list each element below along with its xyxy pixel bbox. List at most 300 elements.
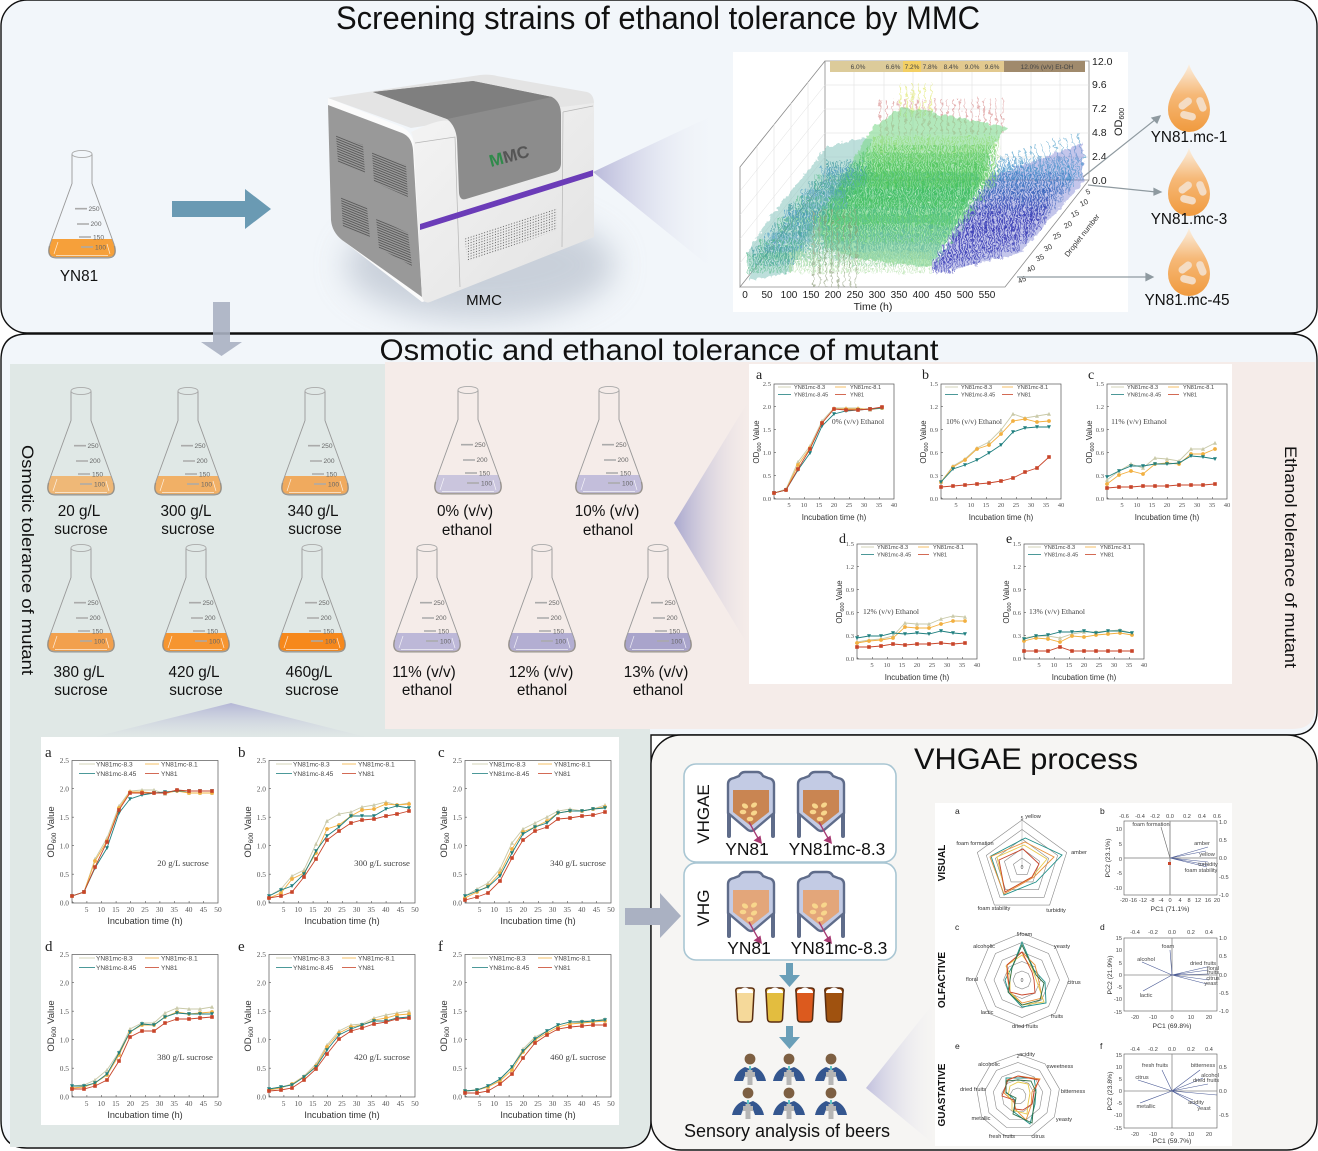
droplet axis ticks: 20 (1062, 219, 1074, 231)
flask: 380 g/L sucrose: 250 (88, 600, 99, 607)
PCA b (1100, 806, 1229, 913)
chart: sucrose a: a (45, 745, 52, 761)
flask: 20 g/L sucrose: 250 (88, 443, 99, 450)
PCA f: bitterness (1191, 1063, 1215, 1069)
chart: ethanol b: OD (919, 452, 928, 464)
flask: 13% ethanol: 200 (666, 615, 678, 622)
light cone: sensory to results (866, 1000, 936, 1146)
radar e: yeasty (1056, 1117, 1072, 1123)
chart: sucrose a: Incubation time (h) (107, 916, 183, 926)
flask: 300 g/L sucrose: 200 (196, 458, 208, 465)
flask: YN81 seed culture: YN81 (60, 268, 98, 285)
chart: sucrose c (438, 745, 615, 926)
PCA f: -15 (1114, 1126, 1122, 1132)
chart: sucrose d (45, 939, 222, 1120)
PCA f: 0.0 (1219, 1089, 1227, 1095)
chart: ethanol b: 10 (968, 502, 975, 509)
chart: ethanol e: e (1006, 532, 1012, 547)
droplet: YN81.mc-45 (1144, 228, 1230, 309)
droplet axis ticks (1016, 187, 1092, 286)
chart: sucrose b: Value (243, 806, 254, 833)
PCA f: -0.4 (1130, 1047, 1140, 1053)
chart: sucrose c: 600 (444, 832, 451, 843)
PCA d: 0.0 (1168, 930, 1176, 936)
flask: 460 g/L sucrose: 250 (318, 600, 330, 607)
chart: sucrose c: 1.5 (453, 813, 462, 822)
chart: sucrose d: 600 (51, 1026, 58, 1037)
chart: ethanol b: YN81 (1017, 392, 1031, 398)
chart: sucrose d: YN81 (161, 965, 178, 972)
ethanol concentration band: 6.6% (886, 64, 901, 71)
flask: 20 g/L sucrose: sucrose (54, 521, 108, 538)
chart: sucrose e: 420 g/L sucrose (354, 1052, 410, 1062)
PCA f: 0.0 (1168, 1047, 1176, 1053)
flask: 20 g/L sucrose: 150 (92, 472, 103, 478)
PCA b: b (1100, 806, 1105, 816)
chart: ethanol b (919, 368, 1065, 522)
flask: 0% ethanol: ethanol (442, 522, 492, 539)
chart: sucrose a: 25 (141, 905, 149, 914)
ethanol concentration band: 9.6% (985, 64, 1000, 71)
chart: ethanol a: 25 (846, 502, 853, 509)
MMC machine (328, 75, 615, 320)
radar e: citrus (1031, 1134, 1045, 1140)
chart: ethanol a: 600 (757, 442, 763, 452)
chart: ethanol d: 40 (974, 662, 981, 669)
time axis ticks: 300 (869, 290, 886, 301)
chart: ethanol c: Incubation time (h) (1135, 513, 1200, 522)
PCA b: 0.4 (1198, 814, 1206, 820)
chart: sucrose c: 45 (593, 905, 600, 914)
chart: ethanol e: 0.0 (1013, 656, 1022, 663)
droplet axis ticks: 35 (1034, 252, 1046, 264)
arrow: flask to MMC (172, 189, 271, 229)
chart: sucrose c: YN81 (554, 771, 571, 778)
ethanol concentration band (830, 61, 1085, 72)
chart: ethanol e: 15 (1066, 662, 1073, 669)
ethanol concentration band: 9.0% (965, 64, 980, 71)
chart: sucrose a: 20 g/L sucrose (157, 858, 209, 868)
PCA b: -10 (1114, 886, 1122, 892)
PCA b: foam stability (1185, 868, 1218, 874)
light cone: sucrose flasks to charts (90, 703, 370, 738)
time axis ticks: 450 (935, 290, 952, 301)
PCA b: 0.0 (1219, 856, 1227, 862)
chart: ethanol e: 0.3 (1013, 633, 1022, 640)
chart: ethanol a: 30 (861, 502, 868, 509)
chart: ethanol d: 5 (870, 662, 874, 669)
OD axis ticks: 12.0 (1092, 56, 1113, 68)
droplet: YN81.mc-1 (1151, 64, 1227, 146)
flask: 300 g/L sucrose: 100 (201, 482, 212, 488)
chart: ethanol e: 25 (1096, 662, 1103, 669)
chart: sucrose e: 25 (338, 1099, 346, 1108)
PCA b: foam formation (1132, 822, 1170, 828)
flask: 380 g/L sucrose (48, 544, 114, 699)
flask: 300 g/L sucrose (155, 387, 221, 538)
chart: ethanol c: YN81 (1183, 392, 1197, 398)
chart: ethanol d: 0.3 (846, 633, 855, 640)
chart: sucrose f: 10 (491, 1099, 498, 1108)
chart: sucrose b (238, 745, 419, 926)
chart: ethanol b: 0.0 (930, 496, 939, 503)
radar c: 0 (1021, 978, 1024, 984)
chart: sucrose d: YN81mc-8.45 (96, 965, 137, 972)
chart: ethanol a: 35 (876, 502, 883, 509)
chart: sucrose d: 1.5 (60, 1007, 69, 1016)
flask: 20 g/L sucrose (48, 387, 114, 538)
flask: 420 g/L sucrose (163, 544, 229, 699)
chart: ethanol e: 0.9 (1013, 587, 1022, 594)
chart: sucrose b: 1.0 (257, 842, 266, 850)
PCA f: -0.5 (1219, 1113, 1229, 1119)
flask: 420 g/L sucrose: 250 (202, 600, 214, 607)
chart: ethanol c: 11% (v/v) Ethanol (1111, 417, 1167, 426)
flask: YN81 seed culture (49, 150, 115, 285)
chart: sucrose d: d (45, 939, 53, 955)
card: VHG fermentation (684, 863, 896, 960)
chart: ethanol a: YN81mc-8.1 (850, 385, 881, 391)
PCA d: -0.4 (1130, 930, 1140, 936)
PCA b: 0 (1119, 857, 1122, 863)
icons: beers (736, 988, 843, 1022)
radar e: fresh fruits (989, 1134, 1015, 1140)
chart: sucrose f: 45 (593, 1099, 600, 1108)
chart: sucrose d: 20 (127, 1099, 134, 1108)
chart: sucrose f: 0.5 (453, 1064, 462, 1073)
flask: 13% ethanol: 150 (669, 628, 680, 636)
chart: sucrose a: 10 (98, 905, 105, 914)
PCA f: 5 (1119, 1077, 1122, 1083)
chart: ethanol b: YN81mc-8.45 (961, 392, 995, 398)
PCA f: 0 (1170, 1132, 1174, 1138)
flask: 10% ethanol (575, 386, 642, 539)
chart: ethanol e: 600 (1007, 602, 1013, 612)
chart: ethanol a: 5 (787, 502, 791, 509)
chart: sucrose c: 25 (534, 905, 542, 914)
chart: sucrose a: YN81mc-8.3 (96, 762, 133, 768)
chart: sucrose b: 600 (248, 832, 255, 843)
side title: osmotic: Osmotic tolerance of mutant (18, 445, 36, 675)
flask: 460 g/L sucrose (279, 544, 345, 699)
PCA b: -0.2 (1150, 814, 1160, 820)
chart: ethanol c: 1.5 (1096, 381, 1105, 388)
chart: sucrose a: 15 (112, 905, 120, 914)
flask: 0% ethanol (435, 386, 501, 539)
chart: sucrose c: YN81mc-8.1 (554, 762, 591, 768)
card: VHG fermentation: YN81mc-8.3 (791, 938, 887, 958)
chart: sucrose e: 1.5 (257, 1007, 266, 1016)
chart: ethanol d: 35 (959, 662, 966, 669)
chart: sucrose b: 50 (411, 905, 419, 914)
chart: sucrose c: 340 g/L sucrose (550, 858, 606, 868)
radar a: turbidity (1046, 908, 1066, 914)
chart: sucrose f: Incubation time (h) (500, 1110, 576, 1120)
chart: ethanol a: 1.5 (763, 427, 772, 434)
time axis ticks: 50 (761, 290, 773, 301)
PCA b: -8 (1150, 898, 1154, 904)
chart: ethanol e: Value (1002, 580, 1011, 602)
chart: ethanol a: 10 (801, 502, 808, 509)
chart: ethanol e: 1.5 (1013, 541, 1022, 548)
chart: ethanol b: 20 (998, 502, 1005, 509)
chart: sucrose d: YN81mc-8.1 (161, 956, 198, 962)
chart: sucrose d: 40 (185, 1099, 193, 1108)
OD axis ticks: 7.2 (1092, 103, 1107, 115)
flask: 13% ethanol: 100 (671, 638, 682, 646)
PCA b: -1.0 (1219, 893, 1229, 899)
chart: ethanol c: 0.0 (1096, 496, 1105, 503)
chart: ethanol d: 1.2 (846, 564, 854, 571)
flask: 10% ethanol: 10% (v/v) (575, 503, 639, 520)
chart: sucrose d: 15 (112, 1099, 120, 1108)
arrow: fermentation to beers (779, 963, 800, 987)
chart: sucrose e: e (238, 939, 245, 955)
ethanol concentration band: 12.0% (v/v) Et-OH (1021, 64, 1074, 71)
chart: sucrose e: 1.0 (257, 1036, 266, 1044)
chart: ethanol d: YN81 (933, 552, 947, 558)
chart: ethanol b: b (922, 368, 929, 383)
flask: 20 g/L sucrose: 200 (90, 458, 101, 465)
chart: ethanol a: 15 (816, 502, 823, 509)
chart: ethanol d: 30 (944, 662, 951, 669)
3D growth chart (733, 52, 1128, 313)
flask: 300 g/L sucrose: 150 (199, 472, 210, 478)
chart: sucrose b: OD (243, 843, 254, 858)
chart: sucrose a: 0.0 (60, 898, 69, 908)
chart: ethanol c: Value (1085, 420, 1094, 442)
PCA d: fruits (1207, 970, 1219, 976)
PCA f: dried fruits (1193, 1078, 1219, 1084)
chart: sucrose d: 0.0 (60, 1092, 69, 1102)
chart: ethanol e: 35 (1126, 662, 1133, 669)
chart: sucrose e: 40 (382, 1099, 390, 1108)
PCA b: 20 (1214, 898, 1220, 904)
PCA b: 0.2 (1183, 814, 1191, 820)
PCA b: PC1 (71.1%) (1151, 906, 1189, 913)
PCA d: lactic (1140, 993, 1153, 999)
flask: 460 g/L sucrose: 150 (323, 628, 334, 636)
chart: sucrose f: 30 (549, 1099, 557, 1108)
radar e: metallic (972, 1116, 991, 1122)
card: VHG fermentation: YN81 (727, 938, 771, 958)
chart: ethanol e: 0.6 (1013, 610, 1022, 617)
flask: 0% ethanol: 250 (474, 442, 486, 449)
flask: 11% ethanol (392, 544, 460, 699)
chart: ethanol b: 1.2 (930, 404, 938, 411)
time axis ticks (742, 290, 996, 301)
PCA d: 0.2 (1187, 930, 1195, 936)
chart: ethanol c: 0.6 (1096, 450, 1105, 457)
PCA d: 10 (1116, 948, 1122, 954)
arrow: charts to VHGAE (625, 893, 681, 938)
chart: sucrose c: 10 (491, 905, 498, 914)
PCA f: metallic (1137, 1104, 1156, 1110)
chart: sucrose d: 30 (156, 1099, 164, 1108)
MMC logo: MMC (487, 142, 531, 171)
PCA f: 0.4 (1205, 1047, 1213, 1053)
PCA d: -10 (1149, 1015, 1157, 1021)
chart: sucrose c: OD (439, 843, 450, 858)
chart: ethanol c: 20 (1164, 502, 1171, 509)
flask: 420 g/L sucrose: 150 (207, 628, 218, 636)
PCA f: PC2 (23.8%) (1107, 1072, 1114, 1110)
PCA f: -10 (1149, 1132, 1157, 1138)
PCA b: PC2 (23.1%) (1105, 839, 1112, 877)
droplet: YN81.mc-3 (1151, 148, 1227, 228)
chart: ethanol c: 40 (1224, 502, 1231, 509)
chart: sucrose a: YN81mc-8.45 (96, 771, 137, 778)
flask: 13% ethanol (624, 544, 691, 699)
ethanol concentration band: 7.8% (923, 64, 938, 71)
PCA d: 15 (1116, 936, 1122, 942)
PCA b: 0.6 (1213, 814, 1221, 820)
PCA d: 1.0 (1219, 936, 1227, 942)
flask: 460 g/L sucrose: 200 (320, 615, 332, 622)
chart: sucrose e: YN81 (358, 965, 375, 972)
chart: ethanol e: YN81 (1100, 552, 1114, 558)
chart: ethanol d: YN81mc-8.45 (877, 552, 911, 558)
chart: sucrose f: YN81mc-8.3 (489, 956, 526, 962)
flask: 340 g/L sucrose: 250 (322, 443, 333, 450)
chart: ethanol b: Value (919, 420, 928, 442)
flask: 340 g/L sucrose: sucrose (288, 521, 342, 538)
chart: sucrose c: 2.0 (453, 784, 462, 794)
chart: sucrose f: 35 (564, 1099, 571, 1108)
flask: 340 g/L sucrose: 150 (326, 472, 337, 478)
PCA f: 0.2 (1187, 1047, 1195, 1053)
chart: sucrose f: 0.0 (453, 1092, 462, 1102)
flask: 380 g/L sucrose: sucrose (54, 682, 108, 699)
PCA b: turbidity (1198, 862, 1218, 868)
flask: 340 g/L sucrose (282, 387, 348, 538)
flask: 380 g/L sucrose: 150 (92, 628, 103, 636)
chart: sucrose f: 40 (578, 1099, 586, 1108)
flask: 380 g/L sucrose: 100 (94, 638, 105, 646)
chart: sucrose c: 5 (478, 905, 482, 914)
chart: ethanol a: 2.5 (763, 381, 772, 388)
chart: ethanol d: 15 (899, 662, 906, 669)
radar c: c (955, 922, 960, 932)
PCA b: -0.5 (1219, 875, 1229, 881)
flask: 380 g/L sucrose: 200 (90, 615, 101, 622)
radar a: foam stability (978, 906, 1011, 912)
PCA b: 1.0 (1219, 820, 1227, 826)
chart: ethanol b: 30 (1028, 502, 1035, 509)
chart: sucrose d: 5 (85, 1099, 89, 1108)
chart: sucrose b: 40 (382, 905, 390, 914)
chart: ethanol a: YN81mc-8.45 (794, 392, 828, 398)
chart: ethanol c: 5 (1120, 502, 1124, 509)
chart: sucrose b: 0.5 (257, 870, 266, 879)
chart: sucrose e: 5 (282, 1099, 286, 1108)
chart: sucrose d: 50 (214, 1099, 222, 1108)
chart: sucrose b: 0.0 (257, 898, 266, 908)
chart: ethanol c: 600 (1090, 442, 1096, 452)
flask: 380 g/L sucrose: 380 g/L (53, 664, 105, 681)
PCA d: 0 (1170, 1015, 1174, 1021)
time axis ticks: 550 (979, 290, 996, 301)
PCA d: 0.0 (1219, 973, 1227, 979)
chart: sucrose c: 15 (505, 905, 513, 914)
radar e: sweetness (1047, 1064, 1073, 1070)
chart: sucrose e: 0.5 (257, 1064, 266, 1073)
label: MMC: MMC (466, 292, 502, 309)
chart: ethanol a: YN81 (850, 392, 864, 398)
chart: sucrose a: 45 (200, 905, 207, 914)
panel: ethanol growth charts (749, 364, 1232, 684)
chart: ethanol a (752, 368, 898, 522)
chart: ethanol e: 10 (1051, 662, 1058, 669)
PCA b: -12 (1139, 898, 1147, 904)
flask: 460 g/L sucrose: 100 (325, 638, 336, 646)
chart: ethanol d (835, 532, 981, 682)
chart: sucrose b: 35 (368, 905, 375, 914)
PCA b: -20 (1120, 898, 1128, 904)
chart: sucrose f: 600 (444, 1026, 451, 1037)
radar e: alcoholic (978, 1062, 1000, 1068)
chart: sucrose c: 1.0 (453, 842, 462, 850)
chart: sucrose d: 380 g/L sucrose (157, 1052, 213, 1062)
chart: ethanol e: YN81mc-8.45 (1044, 552, 1078, 558)
chart: sucrose d: YN81mc-8.3 (96, 956, 133, 962)
chart: ethanol b: 5 (954, 502, 958, 509)
chart: sucrose a: 40 (185, 905, 193, 914)
PCA b: 5 (1119, 842, 1122, 848)
card: VHGAE fermentation (684, 764, 896, 862)
chart: ethanol b: 0.9 (930, 427, 939, 434)
chart: sucrose c: YN81mc-8.45 (489, 771, 530, 778)
droplet axis ticks: 25 (1051, 230, 1063, 242)
chart: sucrose e: 2.0 (257, 978, 266, 988)
chart: sucrose e: 30 (353, 1099, 361, 1108)
chart: sucrose d: 0.5 (60, 1064, 69, 1073)
flask: 10% ethanol: 200 (618, 457, 629, 464)
PCA f: -20 (1131, 1132, 1139, 1138)
chart: sucrose e: YN81mc-8.45 (293, 965, 334, 972)
flask: 420 g/L sucrose: 100 (209, 638, 220, 646)
chart: sucrose f: 460 g/L sucrose (550, 1052, 606, 1062)
flask: 0% ethanol: 0% (v/v) (437, 503, 493, 520)
OD axis ticks: 4.8 (1092, 127, 1107, 139)
chart: ethanol a: 40 (891, 502, 898, 509)
chart: sucrose e: 35 (368, 1099, 375, 1108)
flask: 20 g/L sucrose: 100 (94, 482, 105, 488)
droplet axis ticks: 15 (1069, 208, 1081, 220)
chart: ethanol d: 10 (884, 662, 891, 669)
zone: osmotic background (10, 364, 650, 1147)
flask: 11% ethanol: 100 (440, 638, 451, 646)
chart: sucrose b: 5 (282, 905, 286, 914)
flask: 300 g/L sucrose: 250 (194, 443, 206, 450)
radar a: 5 (1021, 816, 1024, 822)
flask: 300 g/L sucrose: sucrose (161, 521, 215, 538)
heading: osmotic and ethanol: Osmotic and ethanol tolerance of mutant (380, 334, 939, 367)
chart: sucrose f: 2.0 (453, 978, 462, 988)
chart: ethanol e: 5 (1037, 662, 1041, 669)
flask: 10% ethanol: ethanol (583, 522, 633, 539)
PCA f: -10 (1114, 1113, 1122, 1119)
time axis ticks: 0 (742, 290, 748, 301)
PCA d: -10 (1114, 997, 1122, 1003)
flask: 460 g/L sucrose: 460g/L (286, 664, 332, 681)
flask: 0% ethanol: 200 (476, 457, 488, 464)
chart: ethanol c: 0.3 (1096, 473, 1105, 480)
chart: ethanol e: 40 (1141, 662, 1148, 669)
chart: sucrose e: 2.5 (257, 950, 266, 959)
chart: ethanol c: 1.2 (1096, 404, 1104, 411)
flask: 0% ethanol: 150 (479, 470, 490, 478)
